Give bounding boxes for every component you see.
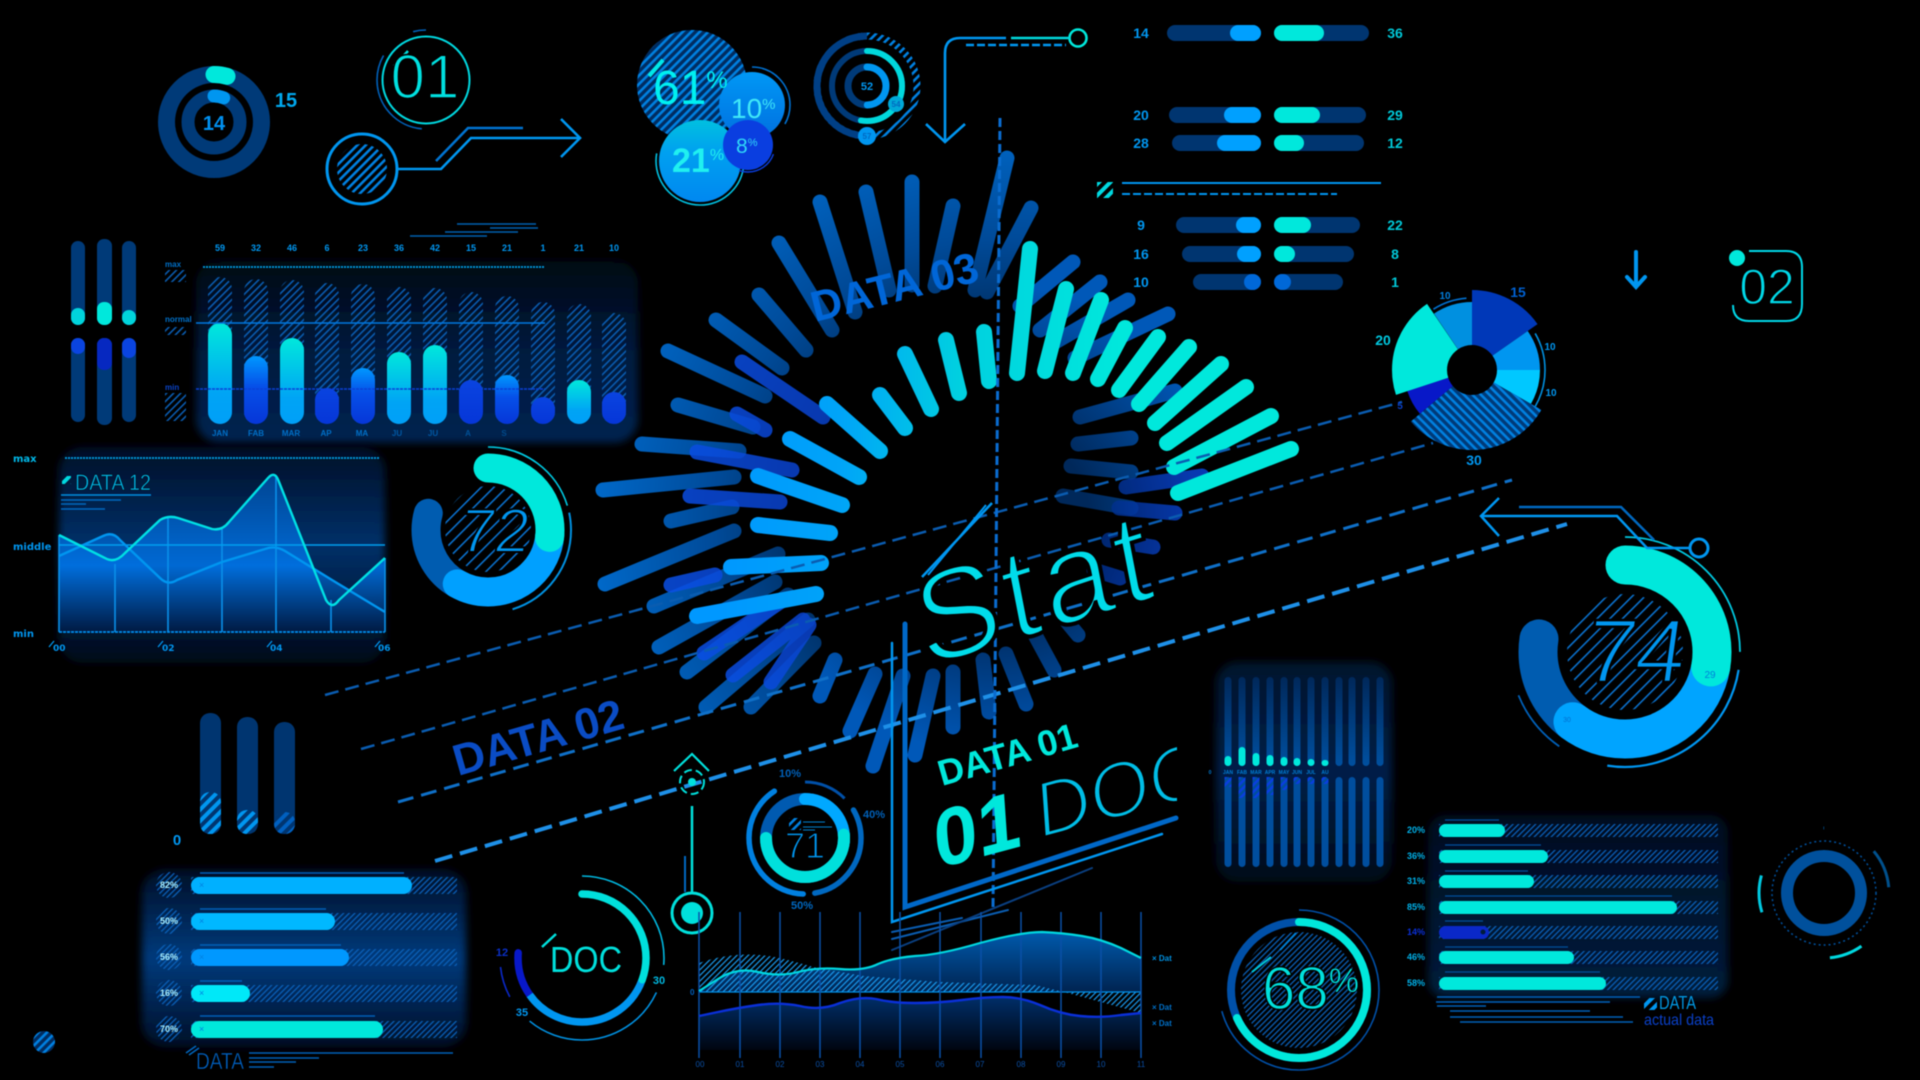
ring gauge: 68%: 68 (1262, 955, 1329, 1022)
panel: horizontal progress bars (142, 869, 466, 1074)
chart grid verticals (699, 912, 1141, 1058)
bar chart legend (165, 260, 192, 421)
percent labels: 85% (1407, 902, 1425, 912)
bar chart month labels: S (501, 429, 507, 438)
ring gauge: 14 / 15 (166, 74, 297, 170)
bubble 10% (714, 67, 790, 143)
bar chart top numbers: 6 (324, 243, 330, 253)
panel: right horizontal bars (1407, 815, 1728, 1029)
right numbers (1387, 25, 1403, 290)
ring gauge: DOC: 12 (496, 947, 508, 959)
x axis labels: 00 (53, 644, 66, 654)
x axis labels: 01 (736, 1060, 745, 1069)
ring gauge: 74: 74 (1579, 601, 1693, 702)
bar chart month labels: A (465, 429, 471, 438)
left numbers: 14 (1133, 25, 1149, 41)
blue curve (699, 997, 1141, 1017)
bar chart month labels: MAR (282, 429, 300, 438)
ring gauge: 68% (1219, 910, 1379, 1070)
hatched tracks (1439, 824, 1718, 990)
small hatched bars (173, 713, 295, 849)
legend: 0 (690, 988, 695, 997)
ring gauge: 74: 30 (1563, 717, 1571, 724)
pie labels: 30 (1466, 452, 1482, 468)
right numbers: 8 (1391, 246, 1399, 262)
right numbers: 12 (1387, 135, 1403, 151)
badge: 02: 02 (1739, 259, 1795, 315)
blue left fills (1217, 25, 1261, 290)
label: DATA 03: DATA 03 (806, 244, 984, 332)
percent labels: 20% (1407, 825, 1425, 835)
bar chart top numbers: 21 (574, 243, 584, 253)
ring: decorative gauge bottom right (1759, 828, 1889, 958)
panel: horizontal progress bars: × (199, 916, 204, 926)
left numbers: 20 (1133, 107, 1149, 123)
hatched node with arrow (327, 119, 580, 204)
ring gauge: DOC: 35 (516, 1007, 528, 1019)
panel caption DATA (186, 1046, 453, 1074)
percent labels: 36% (1407, 851, 1425, 861)
sunburst back layer bars: bottom and right (820, 262, 1175, 766)
month labels: APR (1265, 770, 1276, 776)
connector arrow left (1481, 498, 1708, 557)
pie labels (1375, 284, 1557, 468)
month labels: MAR (1250, 770, 1262, 776)
ring gauge: 71 (749, 768, 885, 912)
bubble chart: 10 (731, 93, 762, 124)
ring gauge: 72 (405, 447, 571, 613)
badge: 02 (1729, 250, 1802, 321)
sunburst radial chart (603, 158, 1291, 766)
x axis labels: 04 (270, 644, 283, 654)
bar chart top numbers (215, 243, 619, 253)
bar chart hatched tracks (208, 277, 626, 424)
big label: 01 DOC: DOC (1024, 724, 1214, 854)
bar chart top numbers: 23 (358, 243, 368, 253)
percent badges: 50% (160, 916, 178, 926)
bubble chart: 8 (736, 135, 748, 158)
x axis labels: 06 (936, 1060, 945, 1069)
blue line series (59, 534, 385, 612)
area fills (699, 932, 1141, 992)
month labels: 0 (1209, 770, 1212, 776)
right numbers: 29 (1387, 107, 1403, 123)
hatched tracks (191, 877, 457, 1038)
bubble chart: % (748, 137, 758, 149)
small hatched bars: 0 (173, 832, 181, 849)
progress fills (191, 877, 412, 1038)
x axis labels: 11 (1137, 1060, 1146, 1069)
pie labels: 10 (1544, 342, 1556, 353)
percent badges: 70% (160, 1024, 178, 1034)
legend: × Dat (1152, 954, 1172, 963)
pie labels: 10 (1545, 388, 1557, 399)
chart title DATA 12: DATA 12 (75, 470, 151, 495)
panel: horizontal progress bars: × (199, 1024, 204, 1034)
hatched lower tips (1224, 777, 1328, 798)
left numbers: 10 (1133, 274, 1149, 290)
right numbers: 1 (1391, 274, 1399, 290)
x axis labels: 10 (1097, 1060, 1106, 1069)
month labels: FAB (1237, 770, 1247, 776)
ring gauge: 71: 50% (791, 900, 813, 912)
percent labels: 58% (1407, 978, 1425, 988)
cyan curve (699, 932, 1141, 991)
month labels: AU (1321, 770, 1329, 776)
pie labels: 15 (1510, 284, 1526, 300)
cyan tips (1224, 747, 1328, 766)
target rings: 52: 57 (863, 132, 872, 141)
ring gauge: 74 (1510, 537, 1740, 767)
percent badges: 16% (160, 988, 178, 998)
connector arrow down (926, 30, 1086, 142)
percent badges: 82% (160, 880, 178, 890)
ring gauge: DOC (496, 876, 665, 1040)
percent badges: 56% (160, 952, 178, 962)
percent labels: 46% (1407, 952, 1425, 962)
bar chart top numbers: 46 (287, 243, 297, 253)
upper bars (1224, 677, 1384, 766)
left numbers: 28 (1133, 135, 1149, 151)
ring gauge: 14 / 15: 14 (203, 113, 226, 135)
panel caption DATA: DATA (196, 1048, 245, 1074)
panel: area chart DATA 12 (13, 447, 391, 663)
cyan line series (59, 475, 385, 605)
bottom area chart (690, 912, 1172, 1069)
bubble 61% (637, 30, 747, 140)
month labels: MAY (1279, 770, 1290, 776)
bar chart month labels: JU (392, 429, 402, 438)
target rings: 52: 52 (861, 81, 873, 93)
legend: × Dat (1152, 1003, 1172, 1012)
pie chart (1375, 284, 1557, 468)
big label: 01 DOC (936, 746, 1178, 866)
big label: 01 DOC: 01 (921, 775, 1030, 884)
x axis labels: 00 (696, 1060, 705, 1069)
bubble chart (637, 30, 790, 205)
month labels: JUL (1306, 770, 1316, 776)
bars fill (1439, 824, 1677, 990)
bubble chart: 21 (672, 142, 710, 180)
caption: DATA actual data: DATA (1659, 993, 1696, 1013)
bubble chart: % (706, 67, 728, 94)
bar chart top numbers: 21 (502, 243, 512, 253)
right numbers: 36 (1387, 25, 1403, 41)
hatched band (699, 954, 1141, 1013)
icon: house with signal and node (672, 754, 712, 933)
label: DATA 01: DATA 01 (933, 715, 1082, 794)
bar chart legend: max (165, 260, 182, 269)
diagonal dashed guide lines (325, 402, 1567, 861)
right numbers: 22 (1387, 217, 1403, 233)
target rings: 52 (817, 36, 917, 145)
legend (690, 954, 1172, 1028)
sunburst back layer bars: outer arc (603, 158, 1031, 707)
bar chart top numbers: 1 (540, 243, 546, 253)
ring gauge: 74: 29 (1704, 670, 1716, 681)
bubble chart: % (762, 96, 776, 113)
ring gauge: DOC: 30 (653, 975, 665, 987)
bar chart month labels (212, 429, 507, 438)
bar chart top numbers: 42 (430, 243, 440, 253)
caption: DATA actual data (1436, 993, 1714, 1029)
tracks (1167, 25, 1369, 290)
bar chart top numbers: 10 (609, 243, 619, 253)
x axis labels: 08 (1017, 1060, 1026, 1069)
bar chart month labels: JU (428, 429, 438, 438)
bar chart values (208, 323, 626, 424)
panel: vertical month bars (1209, 662, 1392, 882)
month labels: JAN (1223, 770, 1233, 776)
left numbers (1133, 25, 1149, 290)
ring gauge: 71: 71 (785, 825, 825, 866)
bar chart month labels: MA (356, 429, 368, 438)
pie labels: 5 (1397, 401, 1403, 412)
y axis labels: middle (13, 542, 52, 553)
panel: horizontal progress bars: × (199, 988, 204, 998)
ring gauge: 14 / 15: 15 (275, 90, 297, 112)
ring gauge: 68%: % (1329, 962, 1359, 1000)
label: DATA 02: DATA 02 (447, 690, 629, 786)
paired sliders table (1097, 25, 1403, 290)
bar chart month labels: AP (320, 429, 332, 438)
x axis labels: 05 (896, 1060, 905, 1069)
month labels: JUN (1292, 770, 1302, 776)
y axis labels: max (13, 454, 37, 465)
bar chart top numbers: 36 (394, 243, 404, 253)
x axis labels: 07 (976, 1060, 985, 1069)
lower bars (1224, 777, 1384, 867)
x axis labels (696, 1060, 1146, 1069)
bar chart legend: normal (165, 315, 192, 324)
bubble chart: % (710, 147, 724, 164)
panel: monthly bar chart (165, 243, 638, 443)
vertical sliders (71, 239, 136, 425)
bubble 21% (656, 117, 744, 205)
bar chart legend: min (165, 383, 179, 392)
left numbers: 16 (1133, 246, 1149, 262)
badge: 01: 01 (391, 43, 459, 112)
caption: DATA actual data: actual data (1644, 1012, 1714, 1029)
frame lines around 01 DOC (892, 624, 1176, 950)
bubble chart: 61 (653, 62, 706, 115)
x axis labels: 03 (816, 1060, 825, 1069)
sunburst front layer bars (697, 249, 1291, 616)
ring gauge: DOC: DOC (550, 939, 622, 980)
percent labels (1407, 825, 1425, 988)
bar chart month labels: JAN (212, 429, 228, 438)
y axis labels (13, 454, 52, 640)
panel: horizontal progress bars: × (199, 952, 204, 962)
cyan right fills (1274, 25, 1324, 290)
percent labels: 31% (1407, 876, 1425, 886)
bar chart top numbers: 15 (466, 243, 476, 253)
divider (1097, 182, 1381, 198)
left numbers: 9 (1137, 217, 1145, 233)
bar chart top numbers: 59 (215, 243, 225, 253)
ring gauge: 72: 72 (456, 497, 535, 566)
x axis labels: 04 (856, 1060, 865, 1069)
icon: down arrow (1627, 252, 1645, 287)
bubble 8% (721, 118, 775, 172)
pie labels: 10 (1439, 291, 1451, 302)
badge: 01 (376, 30, 476, 130)
x axis labels (53, 644, 391, 654)
ring gauge: 71: 10% (779, 768, 801, 780)
panel: horizontal progress bars: × (199, 880, 204, 890)
target rings: 52: 54 (892, 100, 901, 109)
sunburst middle layer bars (671, 362, 1202, 682)
title: Stat: Stat (903, 482, 1167, 696)
pie labels: 20 (1375, 332, 1391, 348)
percent labels: 14% (1407, 927, 1425, 937)
icon: hatched dot (33, 1031, 55, 1053)
ring gauge: 71: 40% (863, 809, 885, 821)
y axis labels: min (13, 629, 34, 640)
percent badges (156, 872, 182, 1042)
x axis labels: 02 (776, 1060, 785, 1069)
legend: × Dat (1152, 1019, 1172, 1028)
month labels (1209, 770, 1329, 776)
x axis labels: 06 (378, 644, 391, 654)
decorative header lines (410, 224, 538, 236)
x axis labels: 02 (162, 644, 175, 654)
bar chart top numbers: 32 (251, 243, 261, 253)
vertical dashed axis (993, 118, 1000, 908)
bar chart month labels: FAB (248, 429, 264, 438)
x axis labels: 09 (1057, 1060, 1066, 1069)
